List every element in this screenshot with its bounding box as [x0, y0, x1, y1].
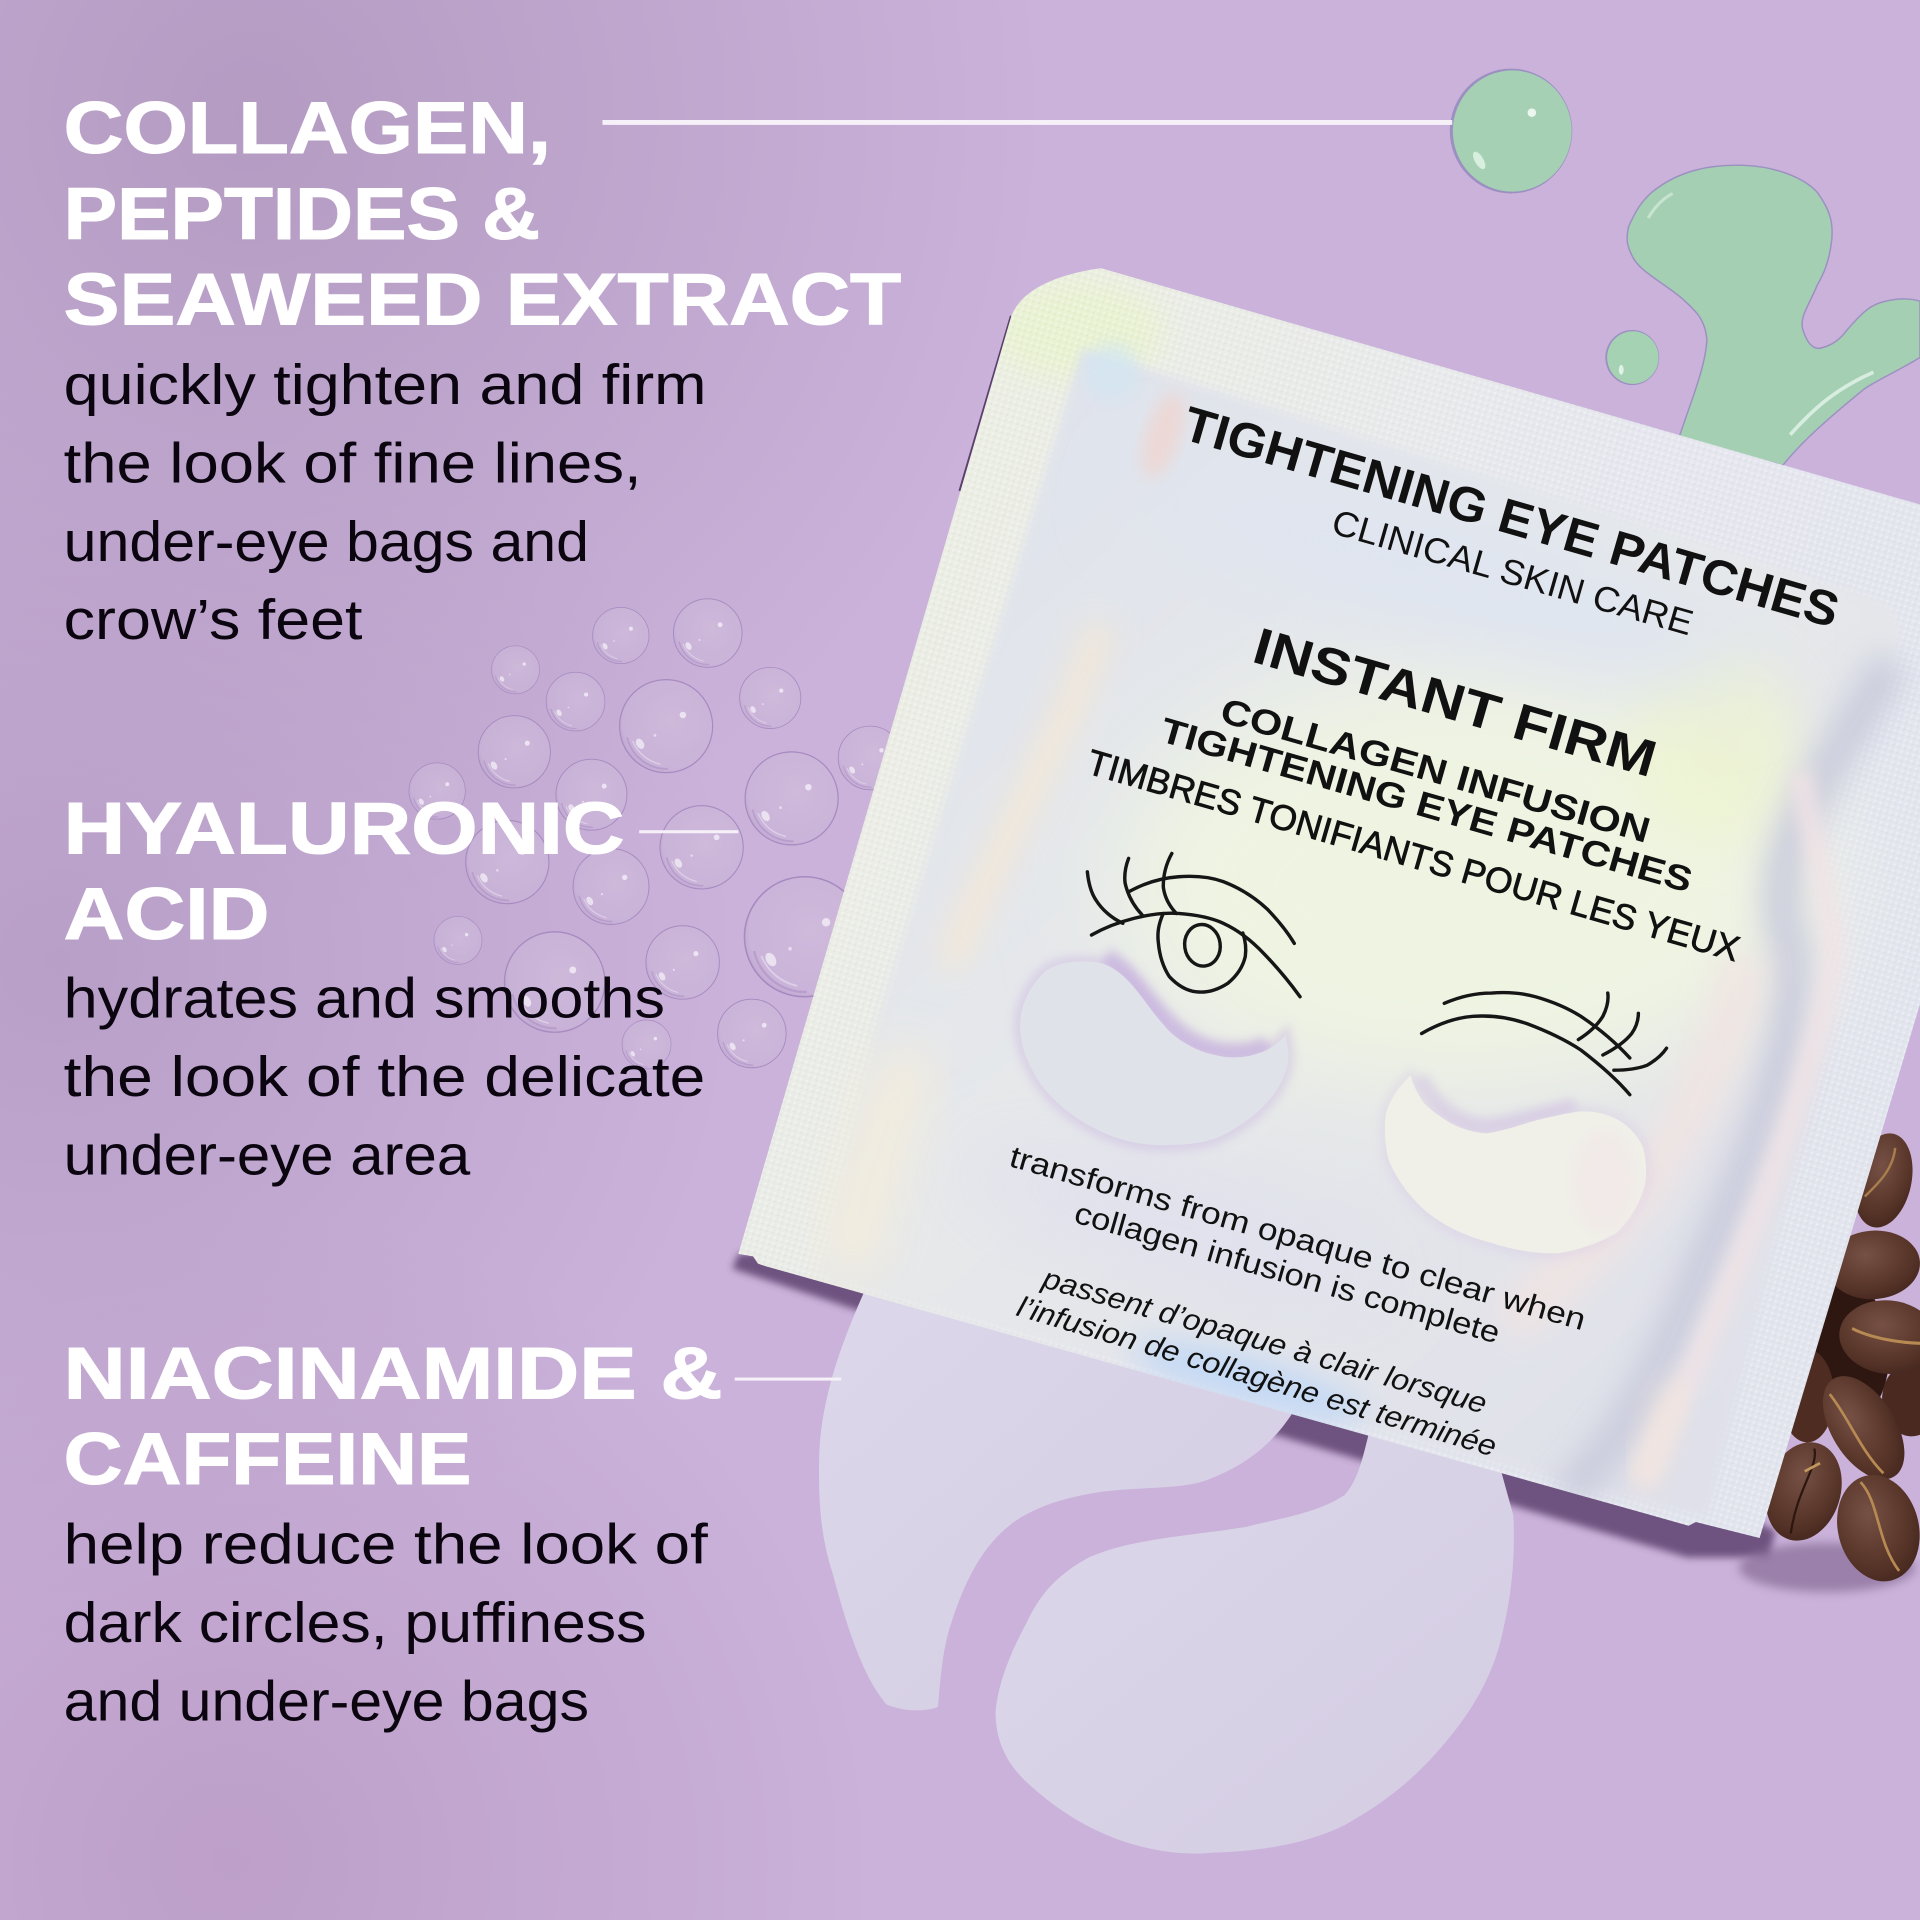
body: hyaluronic acid [64, 967, 705, 1186]
green serum drop large [1450, 69, 1572, 193]
pouch text: french name: TIMBRES TONIFIANTS POUR LES YEUX [1083, 742, 1744, 969]
body: collagen: crow’s feet [64, 588, 363, 651]
water droplets cluster [409, 599, 902, 1069]
body: hyaluronic acid: the look of the delicate [64, 1045, 705, 1108]
pouch text: instant firm: INSTANT FIRM [1247, 616, 1663, 788]
body: niacinamide and caffeine: help reduce the look of [64, 1513, 708, 1576]
printed right eye patch [1385, 1075, 1646, 1253]
right gel patch [996, 1433, 1514, 1854]
right eye illustration [1422, 993, 1667, 1095]
pouch text: tightening eye patches: TIGHTENING EYE PATCHES [1177, 397, 1845, 639]
body: niacinamide and caffeine: dark circles, puffiness [64, 1591, 647, 1654]
heading: hyaluronic acid: ACID [64, 872, 269, 955]
body: collagen: the look of fine lines, [64, 431, 642, 494]
leader line: niacinamide [735, 1378, 841, 1381]
left gel patch [819, 1286, 1296, 1710]
pouch inner panel iridescence [819, 343, 1899, 1517]
heading: niacinamide and caffeine [64, 1331, 722, 1500]
benefit block: hyaluronic acid [64, 786, 705, 1186]
green serum splash [1627, 165, 1920, 465]
pouch body with sealed edge [686, 245, 1920, 1592]
benefit block: niacinamide and caffeine [64, 1331, 722, 1732]
body: hyaluronic acid: hydrates and smooths [64, 967, 665, 1030]
heading: collagen [64, 86, 901, 340]
product pouch [686, 245, 1920, 1592]
heading: collagen: SEAWEED EXTRACT [64, 257, 901, 340]
heading: niacinamide and caffeine: CAFFEINE [64, 1417, 471, 1500]
pouch text: clinical skin care: CLINICAL SKIN CARE [1328, 502, 1698, 643]
pouch text: french note line one: passent d’opaque à clair lorsque [1038, 1262, 1491, 1421]
printed left eye patch [1020, 956, 1288, 1145]
coffee beans [1739, 1128, 1920, 1592]
body: niacinamide and caffeine: and under-eye bags [64, 1669, 589, 1732]
green serum drop small [1605, 330, 1659, 385]
leader line: collagen to serum drop [602, 120, 1452, 125]
heading: collagen: PEPTIDES & [64, 172, 540, 255]
body: hyaluronic acid: under-eye area [64, 1123, 471, 1186]
pouch text: tightening eye patches second line: TIGHTENING EYE PATCHES [1156, 710, 1697, 900]
pouch text: transforms note: transforms from opaque to clear when [1006, 1140, 1590, 1337]
pouch text: french note line two: l’infusion de collagène est terminée [1013, 1290, 1500, 1463]
benefit block: collagen [64, 86, 901, 651]
body: niacinamide and caffeine [64, 1513, 708, 1732]
body: collagen: under-eye bags and [64, 510, 589, 573]
leader line: hyaluronic [639, 830, 738, 833]
heading: collagen: COLLAGEN, [64, 86, 551, 169]
body: collagen: quickly tighten and firm [64, 353, 707, 416]
heading: niacinamide and caffeine: NIACINAMIDE & [64, 1331, 722, 1414]
eye patch gels behind pouch [819, 1286, 1514, 1854]
bean shadow [1739, 1543, 1915, 1592]
pouch text: collagen infusion: COLLAGEN INFUSION [1216, 690, 1655, 851]
left eye illustration [1087, 853, 1300, 997]
heading: hyaluronic acid [64, 786, 624, 955]
body: collagen [64, 353, 707, 651]
heading: hyaluronic acid: HYALURONIC [64, 786, 624, 869]
pouch text: collagen infusion note: collagen infusion is complete [1071, 1196, 1504, 1350]
pouch shadow [732, 316, 1776, 1558]
